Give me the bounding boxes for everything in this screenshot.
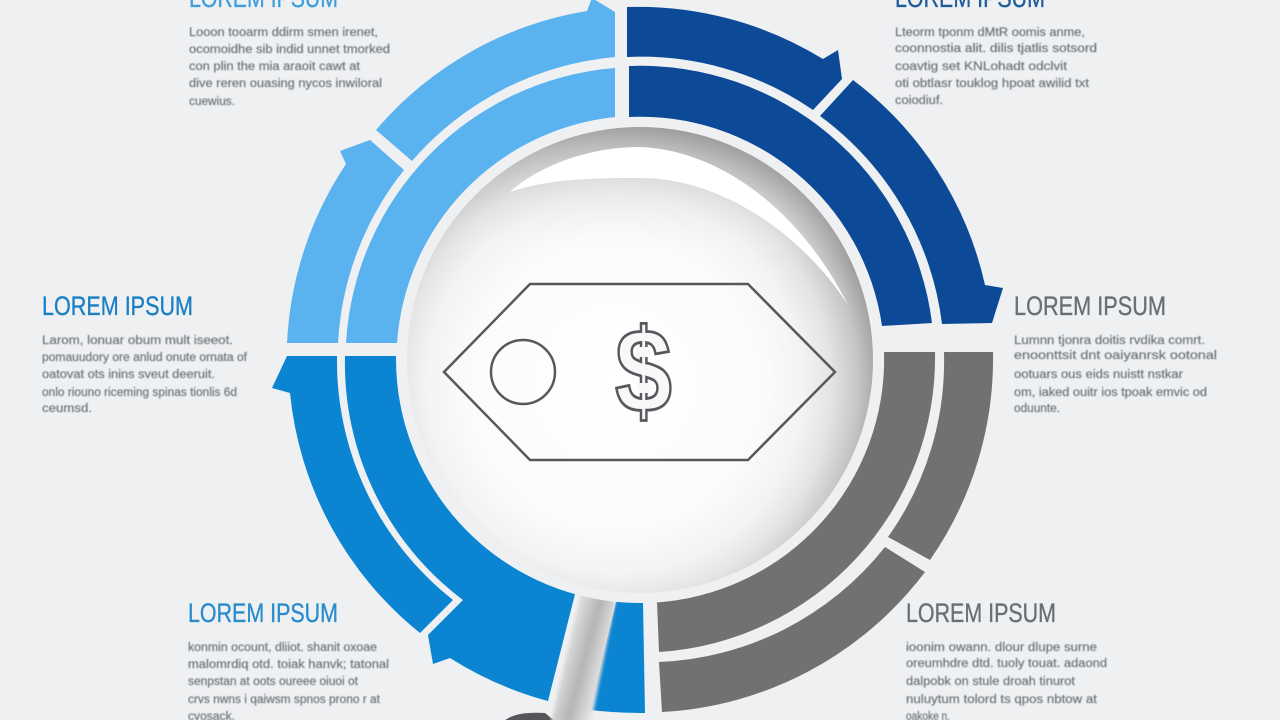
body text: coiodiuf. xyxy=(895,95,943,107)
heading: LOREM IPSUM xyxy=(188,598,338,628)
body text: ceumsd. xyxy=(42,403,92,415)
magnifier lens xyxy=(397,117,883,603)
mid blue small bottom piece xyxy=(590,602,645,713)
dark blue outer arrow top xyxy=(627,7,842,110)
price tag icon xyxy=(444,284,835,460)
light blue outer arrow left xyxy=(287,140,404,343)
body text: oreumhdre dtd. tuoly touat. adaond xyxy=(906,658,1107,670)
magnifier handle xyxy=(551,569,621,720)
magnifier handle base xyxy=(503,713,556,720)
body text: cuewius. xyxy=(189,96,235,108)
body text: om, iaked ouitr ios tpoak emvic od xyxy=(1014,387,1207,399)
tag hole xyxy=(491,340,555,404)
body text: Lteorm tponm dMtR oomis anme, xyxy=(895,27,1085,39)
body text: Looon tooarm ddirm smen irenet, xyxy=(189,27,378,39)
body text: konmin ocount, dliiot. shanit oxoae xyxy=(188,642,377,654)
text block: bottom right xyxy=(906,598,1107,720)
text block: left xyxy=(42,291,248,415)
text block: bottom left xyxy=(188,598,389,720)
lens body xyxy=(407,127,873,593)
body text: con plin the mia araoit cawt at xyxy=(189,61,361,73)
mid blue outer arrow xyxy=(272,356,453,633)
body text: dalpobk on stule droah tinurot xyxy=(906,676,1076,688)
body text: senpstan at oots oureee oiuoi ot xyxy=(188,676,359,688)
segment group: mid blue bottom-left xyxy=(272,356,645,713)
body text: nuluytum tolord ts qpos nbtow at xyxy=(906,694,1098,706)
light blue inner band xyxy=(346,68,615,343)
body text: coavtig set KNLohadt odclvit xyxy=(895,61,1068,73)
text block: top right xyxy=(895,0,1097,107)
body text: oatovat ots inins sveut deeruit. xyxy=(42,369,215,381)
lens top shading xyxy=(407,127,873,593)
body text: Larom, lonuar obum mult iseeot. xyxy=(42,335,233,347)
body text: ootuars ous eids nuistt nstkar xyxy=(1014,369,1183,381)
body text: Lumnn tjonra doitis rvdika comrt. xyxy=(1014,335,1205,347)
text block: right xyxy=(1014,291,1217,415)
dollar sign: $ xyxy=(615,305,672,437)
body text xyxy=(906,642,1107,720)
dark blue inner band xyxy=(629,66,932,326)
body text xyxy=(895,27,1097,107)
body text: dive reren ouasing nycos inwiloral xyxy=(189,78,382,90)
tag outline xyxy=(444,284,835,460)
dollar counter clean-up xyxy=(637,347,650,393)
body text: crvs nwns i qaiwsm spnos prono r at xyxy=(188,694,381,706)
body text: pomauudory ore anlud onute ornata of xyxy=(42,352,248,364)
heading: LOREM IPSUM xyxy=(906,598,1056,628)
heading: LOREM IPSUM xyxy=(1014,291,1166,321)
body text: ocomoidhe sib indid unnet tmorked xyxy=(189,44,390,56)
body text: ioonim owann. dlour dlupe surne xyxy=(906,642,1097,654)
body text: coonnostia alit. dilis tjatlis sotsord xyxy=(895,43,1097,55)
body text xyxy=(188,642,389,720)
lens highlight xyxy=(510,147,848,305)
dark blue outer arrow right xyxy=(820,80,1003,324)
body text xyxy=(1014,335,1217,415)
heading: LOREM IPSUM xyxy=(42,291,193,321)
gray inner band xyxy=(657,352,935,652)
body text: malomrdiq otd. toiak hanvk; tatonal xyxy=(188,659,389,671)
segment group: gray bottom-right xyxy=(657,352,993,712)
body text: oti obtlasr touklog hpoat awilid txt xyxy=(895,78,1090,90)
body text: oduunte. xyxy=(1014,403,1060,415)
body text: onlo riouno riceming spinas tionlis 6d xyxy=(42,387,237,399)
gray outer upper band xyxy=(888,352,993,560)
body text xyxy=(42,335,248,415)
mid blue inner arrow xyxy=(345,356,575,701)
gray outer lower band xyxy=(659,547,925,712)
light blue outer arrow top xyxy=(376,0,615,161)
diagram: circular ring with magnifier xyxy=(272,0,1003,720)
body text: enoonttsit dnt oaiyanrsk ootonal xyxy=(1014,350,1217,362)
text block: top left xyxy=(189,0,390,108)
segment group: light blue top-left xyxy=(287,0,615,343)
body text xyxy=(189,27,390,108)
segment group: dark blue top-right xyxy=(627,7,1003,326)
lens rim xyxy=(397,117,883,603)
